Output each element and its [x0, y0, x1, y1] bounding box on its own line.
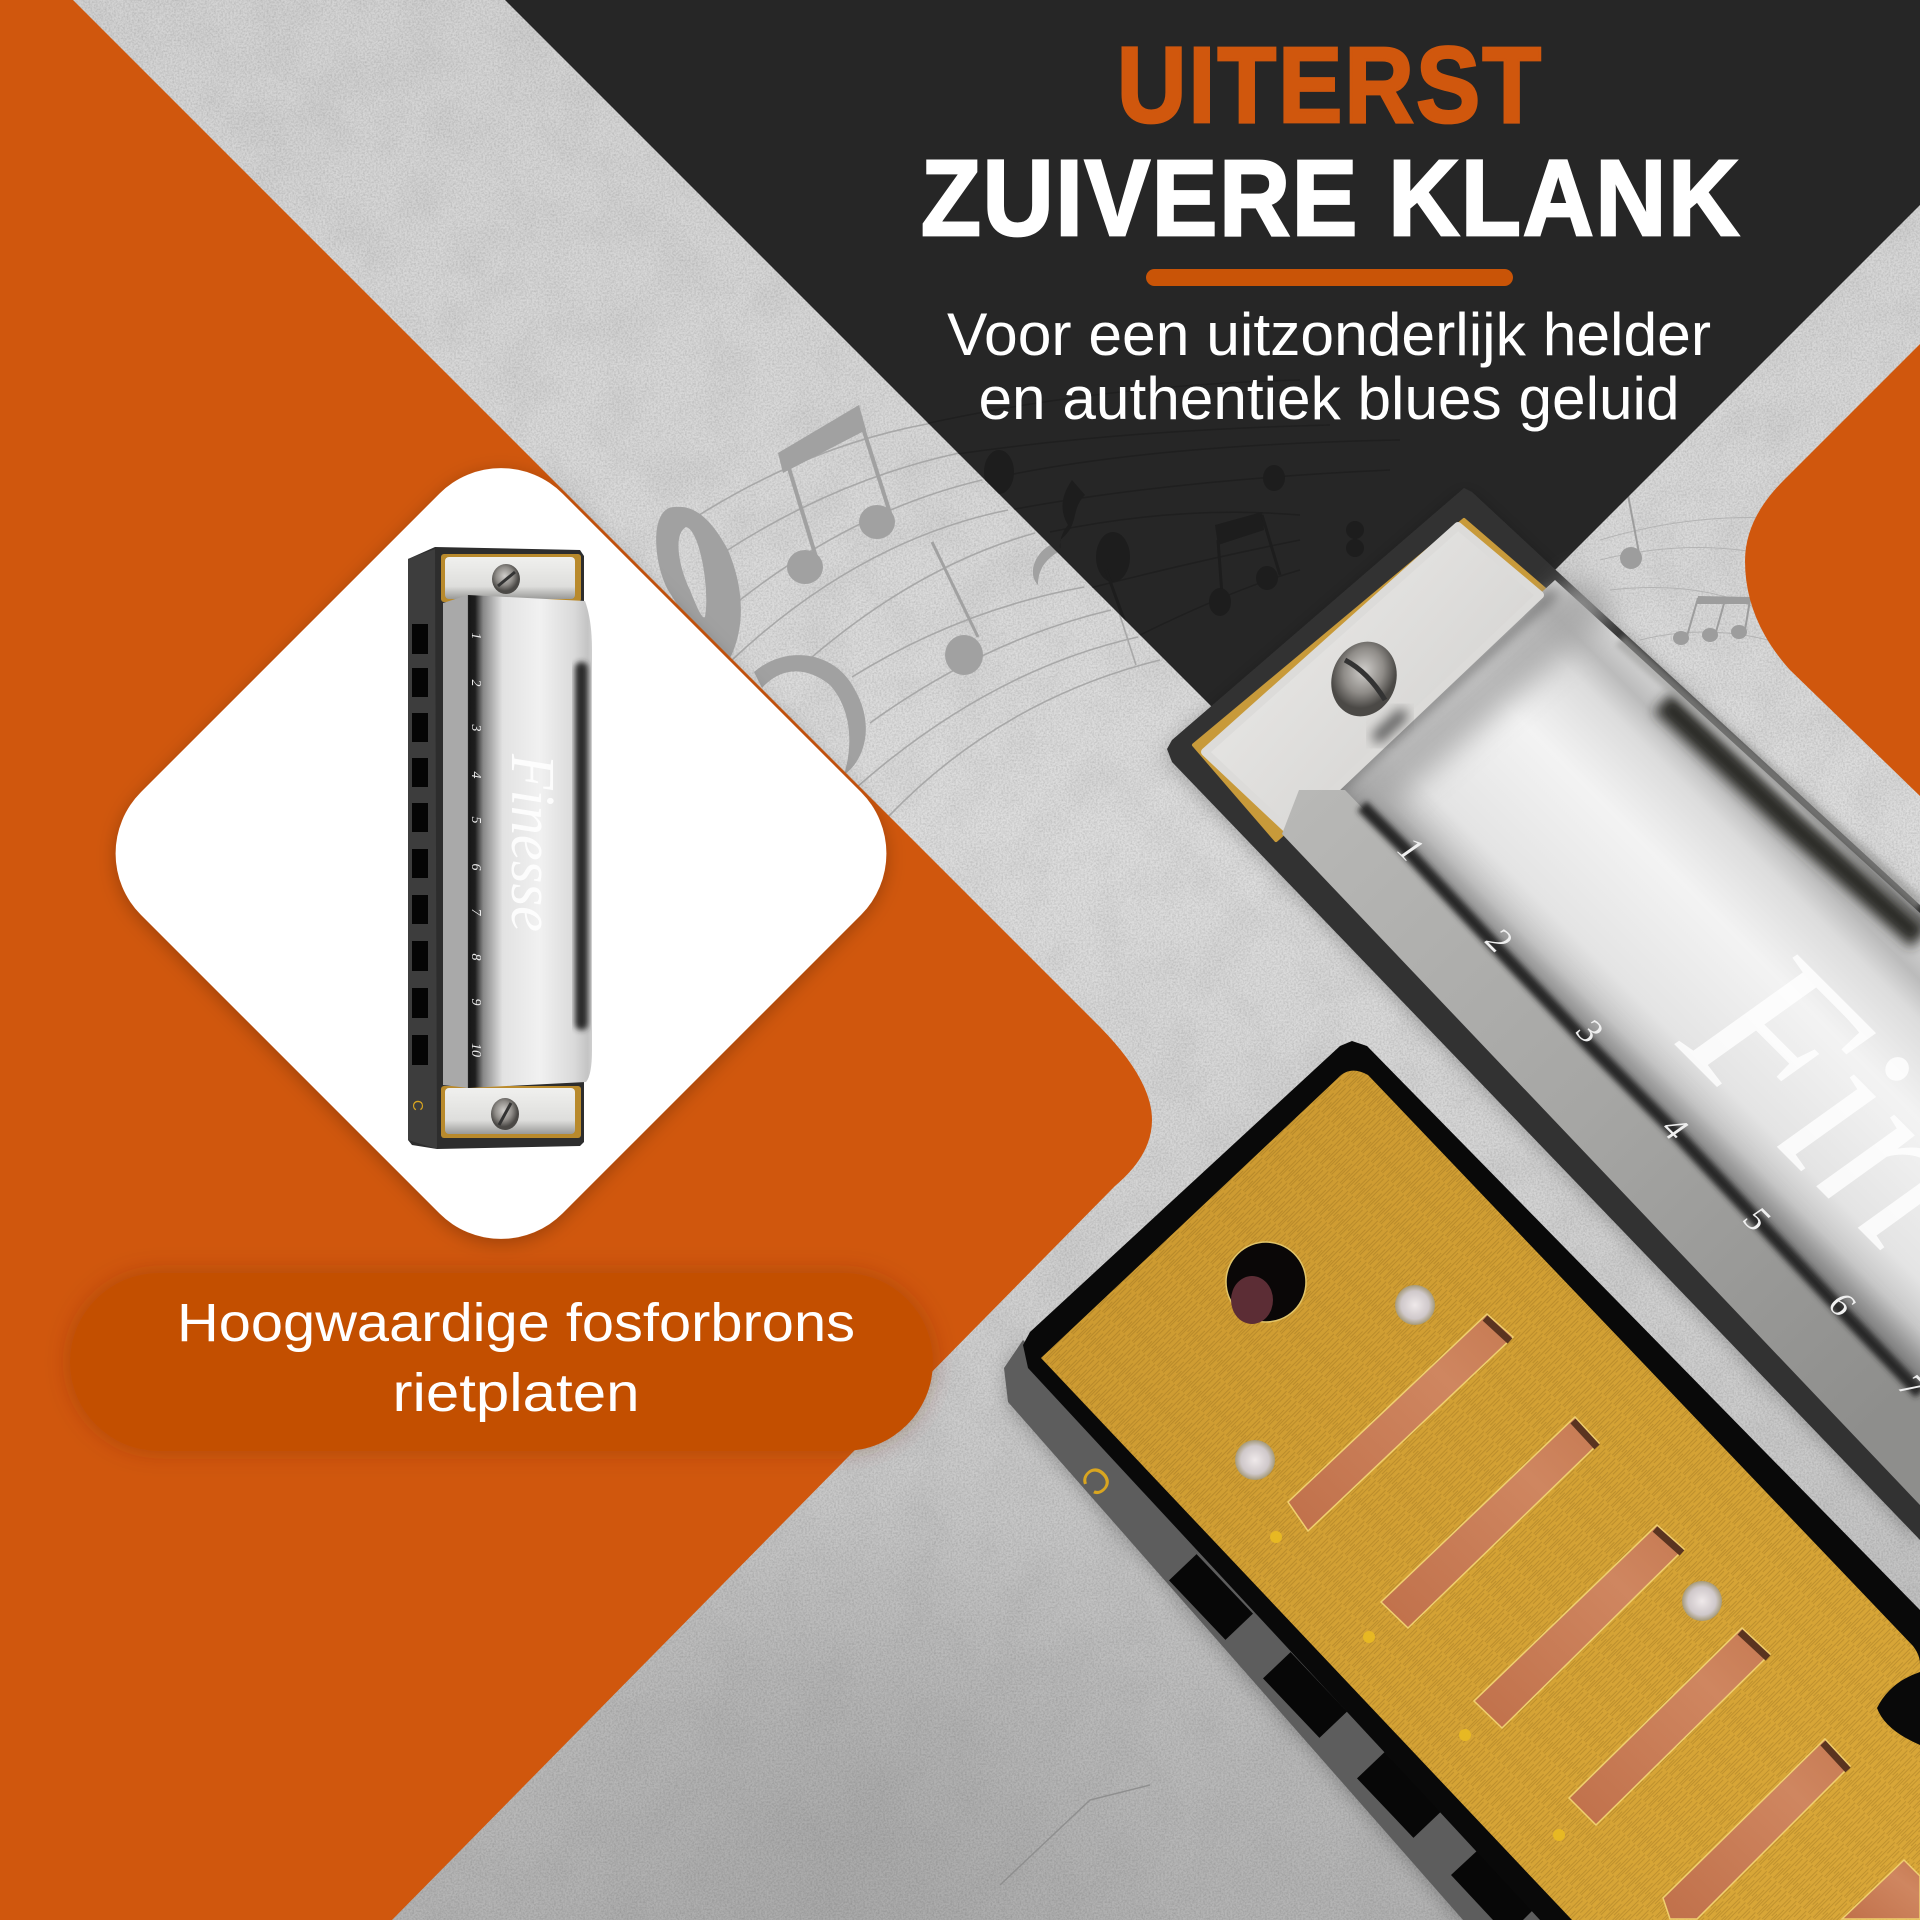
- subtitle: en authentiek blues geluid: [978, 365, 1680, 432]
- title: [921, 25, 1739, 258]
- icon: single note: [932, 542, 983, 675]
- hole numbers: 10: [468, 1043, 483, 1057]
- gold plate: [1041, 1071, 1920, 1920]
- frame and comb: [408, 547, 584, 1149]
- air holes: [412, 624, 428, 1065]
- music staff and notes on concrete: [656, 405, 1800, 817]
- caption text: Hoogwaardige fosforbrons: [177, 1293, 855, 1353]
- hole numbers: 7: [468, 908, 483, 916]
- reed plate gold edge: [1194, 520, 1550, 840]
- slot inner shadows: [1485, 1318, 1848, 1770]
- gray comb side: [1004, 1340, 1600, 1920]
- sound hole: [1226, 1242, 1306, 1324]
- bottom reed plate: [441, 1086, 581, 1138]
- icon: clef fragment: [1033, 545, 1058, 585]
- icon: treble clef: [656, 507, 866, 775]
- small gold dots: [1270, 1531, 1565, 1841]
- icon: beamed notes: [778, 405, 895, 584]
- rivets: [1235, 1285, 1722, 1621]
- cover body: [1282, 580, 1920, 1505]
- hole numbers: [1390, 828, 1920, 1408]
- white diamond panel: [80, 432, 922, 1275]
- hole numbers: 1: [468, 632, 483, 640]
- brushed texture: [1041, 1071, 1920, 1920]
- cover highlights and dark reflections: [1335, 590, 1920, 1400]
- hole numbers: 5: [1736, 1198, 1778, 1240]
- top reed plate: [441, 554, 581, 602]
- screw: [1321, 632, 1407, 726]
- hole numbers: 8: [468, 954, 483, 960]
- hole numbers: 1: [1390, 828, 1432, 870]
- caption text: rietplaten: [392, 1363, 640, 1423]
- hole numbers: 2: [1478, 919, 1520, 961]
- title divider: [1146, 269, 1513, 286]
- hole numbers: 9: [468, 998, 483, 1006]
- key letter: C: [1073, 1457, 1120, 1504]
- right orange panel: [1745, 344, 1920, 796]
- title: ZUIVERE KLANK: [921, 138, 1739, 258]
- hole numbers: 5: [468, 816, 483, 824]
- large silver harmonica close-up: [1167, 488, 1920, 1540]
- caption text: [177, 1293, 855, 1423]
- key letter: C: [409, 1100, 426, 1111]
- slots: [1288, 1314, 1920, 1919]
- title: UITERST: [1117, 25, 1541, 145]
- screw shadow: [1375, 712, 1405, 740]
- subtitle: Voor een uitzonderlijk helder: [947, 301, 1711, 368]
- caption pill: [70, 1273, 933, 1451]
- cover plate: [443, 595, 592, 1088]
- hole numbers: 3: [468, 724, 483, 732]
- reed plate top: [1205, 526, 1540, 832]
- hole numbers: 4: [1654, 1107, 1696, 1149]
- black frame: [1023, 1041, 1920, 1920]
- hole numbers: 3: [1569, 1010, 1611, 1052]
- hole numbers: 6: [468, 864, 483, 870]
- dark triangle panel: [505, 0, 1920, 810]
- notch: [1877, 1672, 1920, 1745]
- cover dark reflection: [575, 662, 588, 1030]
- brand lettering: Finesse: [498, 753, 566, 932]
- strip of cover: [1282, 790, 1920, 1505]
- air holes: [1169, 1554, 1535, 1920]
- hole numbers: 4: [468, 772, 483, 778]
- small harmonica product photo: [408, 547, 592, 1149]
- hole numbers: 6: [1821, 1283, 1863, 1325]
- icon: notes right side: [1600, 495, 1800, 650]
- hole numbers: 2: [468, 680, 483, 686]
- main orange panel: [0, 0, 1152, 1920]
- comb frame: [1167, 488, 1920, 1540]
- hole numbers: [468, 632, 483, 1057]
- gold reed plate harmonica close-up: [1004, 1041, 1920, 1920]
- dark notes on black panel: [928, 422, 1364, 636]
- dark number line: [1362, 806, 1920, 1393]
- subtitle: [947, 301, 1711, 432]
